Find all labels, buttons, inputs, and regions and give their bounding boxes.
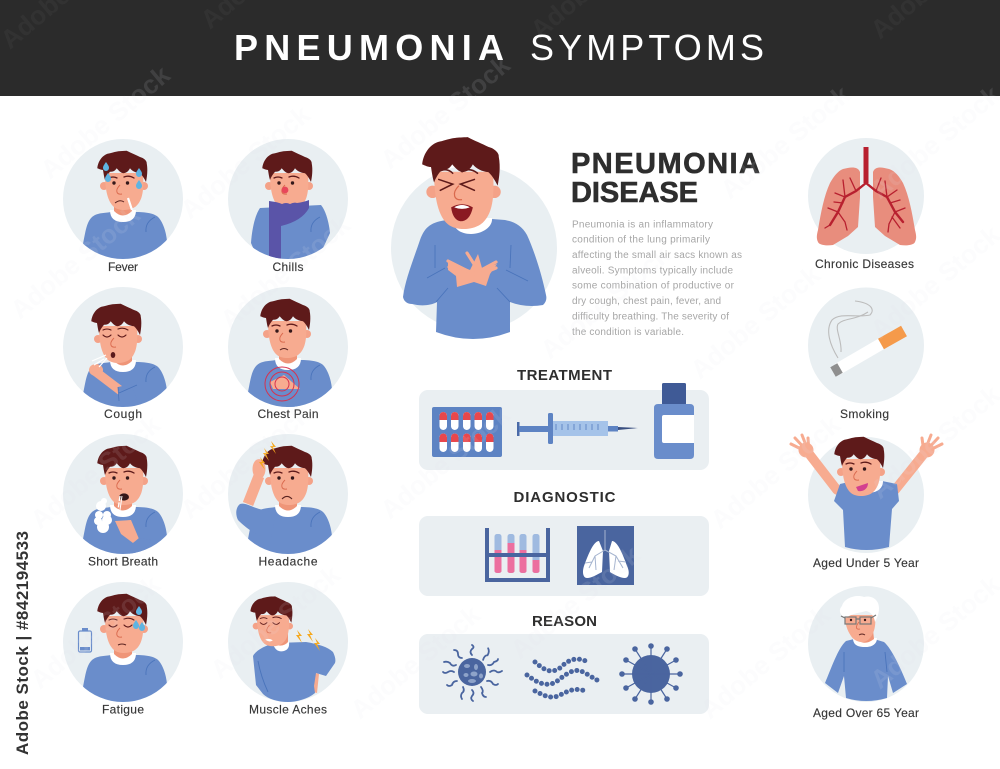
risk: chronic diseases: Chronic Diseases	[815, 257, 914, 271]
heading: pneumonia disease: DISEASE	[571, 177, 698, 209]
description text: affecting the small air sacs known as	[572, 250, 742, 261]
risk: aged under 5	[791, 435, 942, 570]
symptom: chest pain: Chest Pain	[258, 407, 318, 421]
risk: smoking	[808, 288, 924, 421]
symptom: short breath: Short Breath	[88, 554, 158, 568]
watermark: diagonal on page: Adobe Stock	[5, 199, 146, 325]
description text: the condition is variable.	[572, 327, 684, 338]
icon: test tube rack	[487, 528, 548, 580]
heading: pneumonia disease	[571, 148, 760, 209]
watermark: diagonal on page: Adobe Stock	[705, 409, 846, 535]
symptom: muscle aches	[228, 582, 348, 716]
watermark: vertical stock id: Adobe Stock | #842194533	[13, 531, 32, 755]
description text: dry cough, chest pain, fever, and	[572, 296, 721, 307]
icon: medicine bottle	[654, 383, 694, 459]
watermark: diagonal on page: Adobe Stock	[375, 49, 516, 175]
watermark: diagonal on header	[0, 0, 1000, 55]
symptom: muscle aches: Muscle Aches	[249, 702, 327, 716]
description text: Pneumonia is an inflammatory	[572, 220, 713, 230]
symptom: headache: Headache	[258, 554, 318, 568]
symptom: fatigue	[63, 582, 183, 716]
watermark: diagonal on page: Adobe Stock	[345, 599, 486, 725]
watermark: diagonal on page: Adobe Stock	[215, 209, 356, 335]
watermark: diagonal on page: Adobe Stock	[375, 399, 516, 525]
symptom: chills: Chills	[272, 260, 304, 274]
watermark: diagonal on page: Adobe Stock	[695, 599, 836, 725]
panel: treatment	[419, 383, 709, 470]
symptom: fever	[63, 139, 183, 274]
description text: alveoli. Symptoms typically include	[572, 266, 733, 276]
description text: difficulty breathing. The severity of	[572, 312, 729, 322]
treatment heading: TREATMENT	[517, 367, 612, 384]
symptom: chills	[228, 139, 348, 274]
watermark: diagonal on page: Adobe Stock	[175, 399, 316, 525]
watermark: diagonal on page: Adobe Stock	[205, 559, 346, 685]
watermark: diagonal on page: Adobe Stock	[25, 569, 166, 695]
watermark: diagonal on page: Adobe Stock	[535, 239, 676, 365]
watermark: diagonal on page: Adobe Stock	[685, 259, 826, 385]
hands crossed on chest	[448, 253, 497, 287]
panel: diagnostic	[419, 516, 709, 596]
watermark: diagonal on page: Adobe Stock	[25, 409, 166, 535]
icon: lung x-ray	[577, 526, 634, 585]
watermark: diagonal on page: Adobe Stock	[505, 539, 646, 665]
symptom: cough	[63, 287, 183, 421]
risk: chronic diseases	[808, 138, 924, 271]
watermark: diagonal on page: Adobe Stock	[35, 59, 176, 185]
symptom: short breath	[63, 434, 183, 568]
symptom: cough: Cough	[104, 407, 142, 421]
diagnostic heading: DIAGNOSTIC	[514, 489, 616, 506]
symptom: fever: Fever	[108, 260, 138, 274]
reason heading: REASON	[532, 613, 597, 630]
icon: low battery	[78, 628, 92, 652]
risk: smoking: Smoking	[840, 407, 889, 421]
heading: pneumonia disease: PNEUMONIA	[571, 148, 760, 180]
panel: reason	[419, 634, 709, 714]
symptom: chest pain	[228, 287, 348, 421]
description text	[572, 220, 742, 338]
symptom: fatigue: Fatigue	[102, 702, 144, 716]
icon: virus	[619, 643, 683, 705]
header banner	[0, 0, 1000, 96]
risk: aged under 5: Aged Under 5 Year	[813, 556, 919, 570]
risk: aged over 65	[808, 586, 924, 720]
icon: syringe	[517, 413, 638, 444]
title: PNEUMONIA	[234, 27, 504, 68]
watermark: diagonal on page: Adobe Stock	[715, 79, 856, 205]
description text: some combination of productive or	[572, 280, 735, 292]
watermark: diagonal on page: Adobe Stock	[175, 99, 316, 225]
risk: aged over 65: Aged Over 65 Year	[813, 706, 919, 720]
icon: streptococcus chains	[527, 659, 597, 697]
icon: pill blister pack	[432, 407, 502, 457]
header banner: SYMPTOMS	[530, 27, 764, 68]
symptom: headache	[228, 434, 348, 568]
icon: bacterium	[443, 645, 502, 701]
description text: condition of the lung primarily	[572, 234, 710, 246]
main figure: man holding chest	[391, 137, 557, 339]
